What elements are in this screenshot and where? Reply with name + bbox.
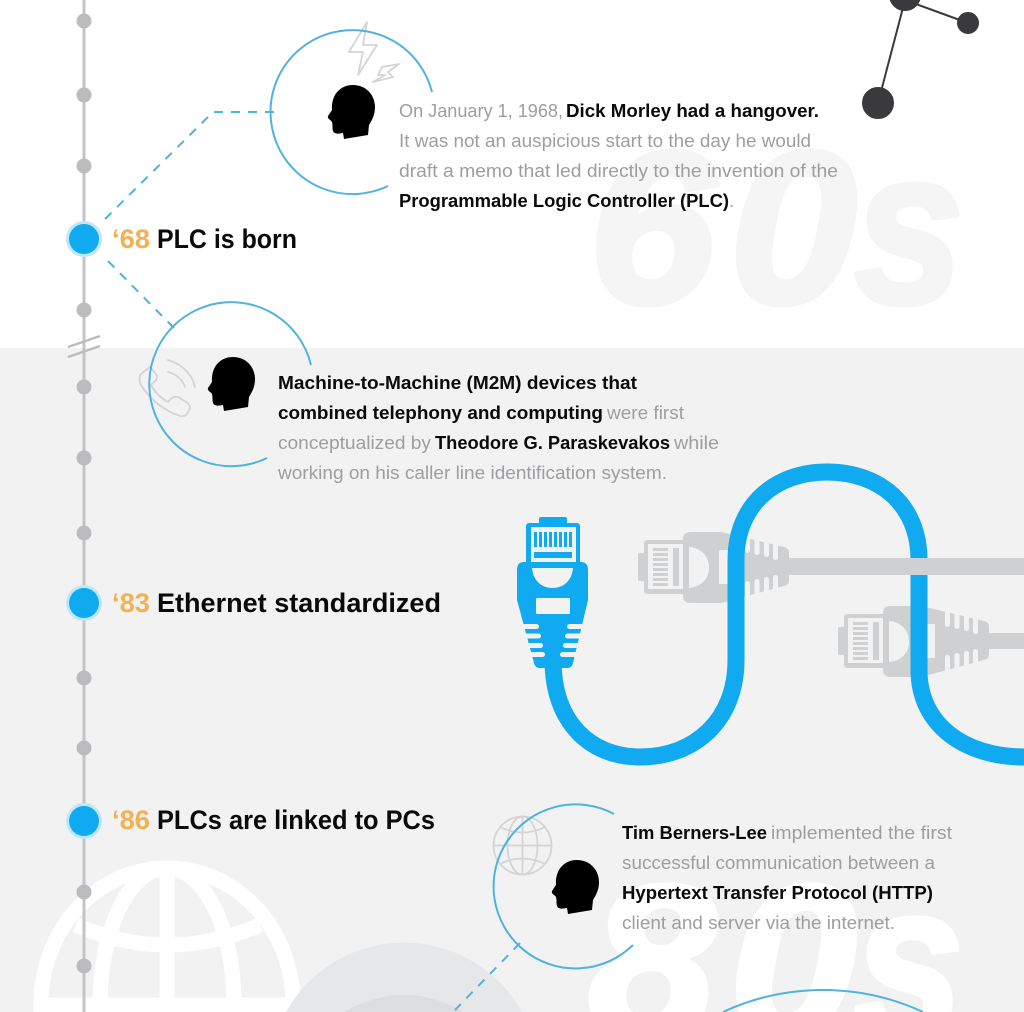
icon: small globe <box>494 816 552 874</box>
text: Morley story <box>399 100 838 211</box>
text: Berners-Lee story: Tim Berners-Lee <box>622 822 767 843</box>
heading: 1986 PLCs linked to PCs: PLCs are linked to PCs <box>157 805 435 835</box>
decade watermark: 60s <box>588 103 964 351</box>
text: Berners-Lee story: client and server via the internet. <box>622 912 895 933</box>
illustration: ethernet cables <box>517 472 1024 757</box>
text: Berners-Lee story: Hypertext Transfer Protocol (HTTP) <box>622 882 933 903</box>
text: M2M story: conceptualized by <box>278 432 432 453</box>
text: Berners-Lee story: implemented the first <box>771 822 952 843</box>
background: grey lower section <box>0 348 1024 1012</box>
icon: head silhouette <box>328 85 375 139</box>
progress ring <box>270 30 432 194</box>
text: Berners-Lee story: successful communication between a <box>622 852 936 873</box>
text: M2M story: working on his caller line identification system. <box>277 462 667 483</box>
next panel ring, cropped at bottom <box>723 990 923 1012</box>
heading: 1968 PLC is born: PLC is born <box>157 224 297 254</box>
text: M2M story: combined telephony and computing <box>278 402 603 423</box>
grey connector lower <box>838 606 989 677</box>
dashed connector: 1968 to M2M <box>103 256 174 328</box>
grey cable lower <box>985 633 1024 649</box>
text: Berners-Lee story <box>622 822 952 933</box>
panel: Tim Berners-Lee <box>494 804 952 968</box>
blue cable <box>553 472 1024 757</box>
blue connector <box>517 517 588 668</box>
dashed connector: Berners-Lee <box>455 943 520 1010</box>
text: Morley story: On January 1, 1968, <box>399 100 563 121</box>
progress ring <box>494 804 633 968</box>
progress ring <box>149 302 311 466</box>
heading: 1983 Ethernet standardized: ‘83 <box>112 588 150 618</box>
decade watermark: 80s <box>588 837 964 1012</box>
dashed connector: 1968 to Morley <box>100 112 274 224</box>
panel: M2M <box>140 302 719 483</box>
decade watermark: 60s: s <box>854 103 964 351</box>
milestone marker: 1968 <box>66 221 102 257</box>
milestone marker: 1986 <box>66 803 102 839</box>
grey cable upper <box>785 558 1024 575</box>
text: M2M story: were first <box>606 402 684 423</box>
text: Morley story: Programmable Logic Controller (PLC) <box>399 190 729 211</box>
decade watermark: 60s: 6 <box>588 107 718 350</box>
icon: head silhouette <box>552 860 599 914</box>
grey connector upper <box>638 532 789 603</box>
text: M2M story <box>277 372 719 483</box>
background: white upper section <box>0 0 1024 348</box>
timeline minor dots <box>76 14 92 974</box>
icon: large background globe <box>34 868 300 1012</box>
decade watermark: 60s: 0 <box>729 107 857 350</box>
text: Morley story: . <box>729 190 734 211</box>
text: M2M story: Theodore G. Paraskevakos <box>435 432 670 453</box>
network node graphic <box>863 0 978 118</box>
heading: 1986 PLCs linked to PCs: ‘86 <box>112 805 150 835</box>
icon: head silhouette <box>208 357 255 411</box>
text: M2M story: Machine-to-Machine (M2M) devices that <box>278 372 637 393</box>
text: M2M story: while <box>673 432 719 453</box>
concentric grey circles <box>286 943 522 1012</box>
milestone marker: 1983 <box>66 585 102 621</box>
panel: Dick Morley <box>270 22 838 211</box>
heading: 1968 PLC is born: ‘68 <box>112 224 150 254</box>
heading: 1983 Ethernet standardized: Ethernet standardized <box>157 588 441 618</box>
text: Morley story: Dick Morley had a hangover. <box>566 100 819 121</box>
text: Morley story: It was not an auspicious start to the day he would <box>399 130 811 151</box>
timeline axis <box>76 0 92 1012</box>
text: Morley story: draft a memo that led directly to the invention of the <box>399 160 838 181</box>
icon: telephone handset <box>140 360 195 416</box>
timeline break mark <box>68 336 100 357</box>
icon: lightning bolts <box>349 22 399 82</box>
